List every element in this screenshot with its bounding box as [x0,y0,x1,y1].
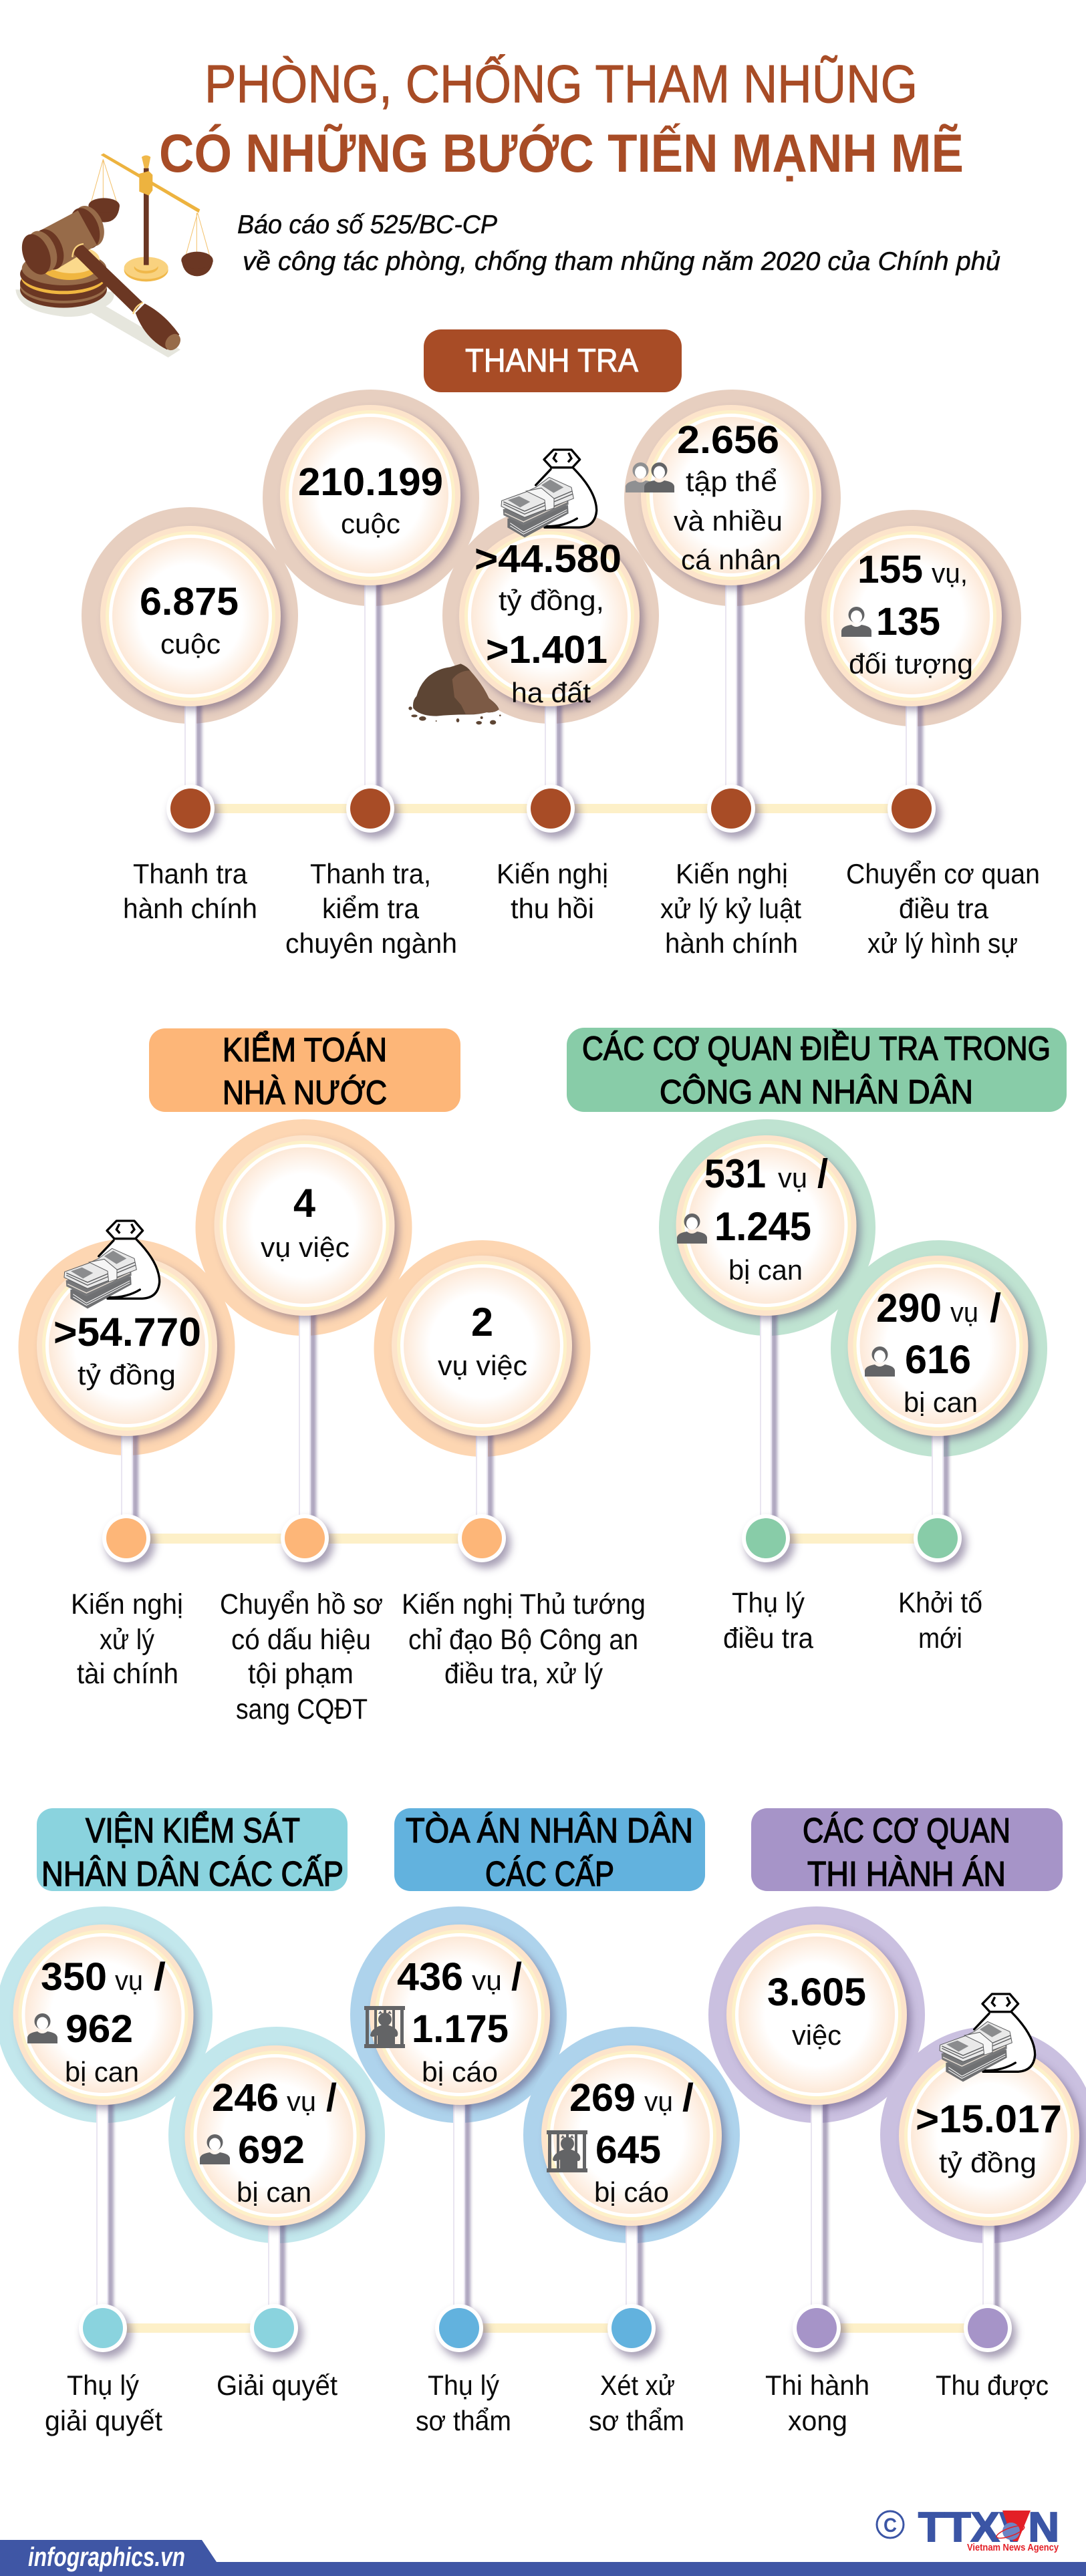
heading: thanh tra [424,329,682,392]
value: việc [792,2019,841,2051]
value [674,418,783,575]
value: 692 [238,2128,305,2172]
value: bị can [904,1387,978,1418]
heading: các cơ quan thi hành án: CÁC CƠ QUAN [803,1812,1010,1850]
timeline dot 3 [527,784,579,839]
value: 616 [905,1337,971,1382]
value [140,580,239,660]
label: thụ lý điều tra: Thụ lý [732,1587,805,1619]
value: 436 [397,1955,463,1999]
value: vụ [778,1162,807,1193]
value: bị can [237,2176,311,2208]
label: kiến nghị thủ tướng chỉ đạo bộ công an điều tra, xử lý: chỉ đạo Bộ Công an [408,1624,638,1656]
subtitle: Báo cáo số 525/BC-CP [237,210,497,239]
label: chuyển cơ quan điều tra xử lý hình sự: xử lý hình sự [867,927,1018,959]
label: chuyển cơ quan điều tra xử lý hình sự [846,858,1040,959]
value: 1.245 [714,1204,811,1249]
label: thụ lý sơ thẩm [416,2370,511,2436]
timeline dot 1 [742,1514,795,1568]
icon: money bag [501,450,597,537]
stat circle: >54.770 tỷ đồng [19,1239,235,1530]
value: 290 [876,1286,942,1330]
value: bị cáo [594,2176,669,2208]
stat circle: 246 vụ / 692 bị can [168,2027,385,2312]
panel: kiểm toán nhà nước [19,1028,646,1725]
value [41,1955,166,2088]
value: bị can [728,1254,803,1286]
heading: viện kiểm sát nhân dân các cấp [37,1808,348,1894]
value: 155 [857,548,923,591]
label: kiến nghị xử lý kỷ luật hành chính: hành chính [665,927,798,959]
value: 246 [212,2076,279,2120]
value: 210.199 [298,460,443,504]
stat circle: 155 vụ, 135 đối tượng [805,510,1021,802]
value: 2.656 [677,418,779,462]
value [438,1300,527,1381]
heading: viện kiểm sát nhân dân các cấp: NHÂN DÂN CÁC CẤP [41,1854,344,1894]
label: chuyển hồ sơ có dấu hiệu tội phạm sang CQĐT: sang CQĐT [236,1693,368,1725]
value: cuộc [160,628,221,660]
label: kiến nghị thu hồi: Kiến nghị [497,858,608,889]
value: vụ [644,2086,673,2117]
value: 1.175 [412,2007,509,2051]
icon: prisoner behind bars [364,2006,405,2048]
icon: money bag [64,1221,160,1308]
value: 962 [65,2007,133,2051]
heading: tòa án nhân dân các cấp: CÁC CẤP [485,1854,614,1894]
value [261,1181,350,1263]
stat circle: 6.875 cuộc [82,507,298,802]
heading: tòa án nhân dân các cấp: TÒA ÁN NHÂN DÂN [406,1812,693,1850]
heading: kiểm toán nhà nước: KIỂM TOÁN [223,1031,387,1068]
panel: tòa án nhân dân [350,1808,740,2436]
heading: viện kiểm sát nhân dân các cấp: VIỆN KIỂM SÁT [86,1811,300,1850]
stat circle: 531 vụ / 1.245 bị can [659,1119,875,1530]
label: kiến nghị thủ tướng chỉ đạo bộ công an điều tra, xử lý: Kiến nghị Thủ tướng [402,1588,646,1620]
stat circle: 210.199 cuộc [263,390,479,802]
timeline dot 1 [102,1514,155,1568]
value: / [511,1955,522,1999]
footer bar [0,2540,1086,2576]
label: thanh tra, kiểm tra chuyên ngành [285,858,457,959]
value: tập thể [686,466,777,497]
icon: person [200,2134,230,2164]
icon: person [841,607,871,637]
value: ha đất [511,677,591,708]
label: thụ lý sơ thẩm: Thụ lý [428,2370,499,2401]
value: >1.401 [486,628,607,672]
value: 645 [595,2128,661,2172]
panel: các cơ quan điều tra [567,1028,1067,1655]
timeline dot 2 [346,784,399,839]
timeline dot 2 [914,1514,966,1568]
logo: TTXVN: Vietnam News Agency [967,2542,1059,2553]
value: 531 [704,1151,766,1196]
value [212,2076,337,2208]
label: thu được: Thu được [936,2370,1049,2401]
value [876,1286,1001,1418]
label: kiến nghị xử lý kỷ luật hành chính: xử lý kỷ luật [660,893,801,924]
label: thanh tra hành chính: Thanh tra [133,858,248,889]
value: vụ [950,1296,978,1328]
stat circle: 290 vụ / 616 bị can [831,1240,1047,1530]
heading: thanh tra: THANH TRA [465,343,638,379]
value: tỷ đồng [939,2147,1037,2178]
value: vụ việc [261,1232,350,1263]
label: chuyển hồ sơ có dấu hiệu tội phạm sang CQĐT: tội phạm [248,1658,354,1690]
stat circle: >44.580 tỷ đồng, >1.401 ha đất [442,507,659,802]
title [159,54,964,184]
value [849,548,973,680]
timeline dot 1 [435,2304,488,2358]
label: xét xử sơ thẩm [589,2370,684,2436]
stat circle: 436 vụ / 1.175 bị cáo [350,1906,567,2312]
label: thụ lý giải quyết: giải quyết [45,2405,162,2436]
icon: money bag [940,1994,1035,2082]
value: vụ [287,2086,316,2117]
icon: person [677,1213,707,1244]
value: / [326,2076,337,2120]
value: / [682,2076,694,2120]
heading: các cơ quan điều tra trong công an nhân dân [567,1028,1067,1112]
label: chuyển cơ quan điều tra xử lý hình sự: Chuyển cơ quan [846,858,1040,889]
stat circle: 2 vụ việc [374,1240,591,1530]
stat circle: 269 vụ / 645 bị cáo [523,2027,740,2312]
value: 6.875 [140,580,239,623]
label: kiến nghị thủ tướng chỉ đạo bộ công an điều tra, xử lý: điều tra, xử lý [444,1658,603,1690]
label: kiến nghị thủ tướng chỉ đạo bộ công an điều tra, xử lý [402,1588,646,1690]
label: khởi tố mới: Khởi tố [898,1587,982,1619]
label: kiến nghị xử lý tài chính: Kiến nghị [71,1588,183,1620]
value [704,1151,828,1286]
label: xét xử sơ thẩm: Xét xử [600,2370,675,2401]
value: 2 [471,1300,493,1344]
timeline dot 4 [707,784,760,839]
label: khởi tố mới: mới [918,1622,962,1655]
value: / [817,1151,828,1196]
value: 3.605 [767,1971,866,2014]
timeline dot 1 [79,2304,132,2358]
label: thanh tra hành chính [123,858,257,924]
label: thi hành xong: xong [788,2405,847,2436]
value: bị cáo [422,2056,498,2088]
label: chuyển hồ sơ có dấu hiệu tội phạm sang CQĐT [220,1588,383,1725]
value [53,1310,201,1391]
timeline dot 1 [166,784,219,839]
label: chuyển hồ sơ có dấu hiệu tội phạm sang CQĐT: có dấu hiệu [231,1624,371,1656]
value [474,537,622,708]
value: bị can [65,2056,139,2088]
timeline dot 2 [281,1514,333,1568]
value [397,1955,522,2088]
timeline dot 2 [250,2304,303,2358]
logo: TTXVN: TTXVN [918,2505,1059,2551]
value: >15.017 [916,2098,1062,2141]
value: 269 [569,2076,636,2120]
subtitle: về công tác phòng, chống tham nhũng năm 2020 của Chính phủ [243,247,1000,276]
value: / [990,1286,1001,1330]
timeline connector [127,1534,482,1544]
stat circle: 2.656 tập thể và nhiều cá nhân [624,390,841,802]
timeline connector [817,2323,988,2333]
logo: TTXVN: C [884,2515,897,2537]
label: thi hành xong [765,2370,869,2436]
stat circle: 350 vụ / 962 bị can [0,1906,213,2312]
header illustration: gavel and scales [15,153,213,357]
label: kiến nghị xử lý kỷ luật hành chính: Kiến nghị [676,858,788,889]
label: thụ lý giải quyết [45,2370,162,2436]
value: 135 [876,600,940,643]
value: cá nhân [681,544,781,575]
label: thụ lý sơ thẩm: sơ thẩm [416,2405,511,2436]
value: 350 [41,1955,107,1999]
value: vụ việc [438,1350,527,1381]
timeline connector [766,1534,938,1544]
label: kiến nghị xử lý tài chính: xử lý [100,1624,154,1656]
label: kiến nghị thu hồi: thu hồi [511,893,594,924]
heading: các cơ quan thi hành án: THI HÀNH ÁN [807,1855,1006,1894]
label: chuyển hồ sơ có dấu hiệu tội phạm sang CQĐT: Chuyển hồ sơ [220,1588,383,1620]
stat circle: >15.017 tỷ đồng [880,2027,1086,2312]
label: thanh tra, kiểm tra chuyên ngành: chuyên ngành [285,927,457,959]
stat circle: 3.605 việc [708,1906,925,2312]
value [916,2098,1062,2178]
timeline connector [459,2323,632,2333]
value: 4 [293,1181,316,1226]
timeline connector [103,2323,274,2333]
value: và nhiều [674,505,783,537]
value: >44.580 [474,537,622,581]
icon: prisoner behind bars [547,2130,587,2172]
label: xét xử sơ thẩm: sơ thẩm [589,2405,684,2436]
value: vụ [472,1965,502,1996]
value: tỷ đồng [78,1359,176,1391]
label: chuyển cơ quan điều tra xử lý hình sự: điều tra [899,893,989,924]
subtitle [237,210,1000,276]
timeline dot 5 [888,784,940,839]
panel: các cơ quan thi hành án [708,1808,1086,2436]
heading: các cơ quan thi hành án [751,1808,1063,1894]
label: kiến nghị thu hồi [497,858,608,924]
title: PHÒNG, CHỐNG THAM NHŨNG [205,54,918,114]
timeline dot 2 [964,2304,1016,2358]
label: thụ lý giải quyết: Thụ lý [67,2370,139,2401]
value: đối tượng [849,648,973,680]
value [298,460,443,539]
label: kiến nghị xử lý tài chính: tài chính [77,1658,178,1690]
timeline dot 3 [458,1514,511,1568]
panel: thanh tra [82,329,1040,959]
label: khởi tố mới [898,1587,982,1655]
value: tỷ đồng, [499,585,604,616]
value [569,2076,694,2208]
label: giải quyết: Giải quyết [217,2370,337,2401]
heading: các cơ quan điều tra trong công an nhân dân: CÔNG AN NHÂN DÂN [660,1073,973,1111]
footer bar: infographics.vn [28,2543,185,2572]
heading: tòa án nhân dân các cấp [394,1808,705,1894]
value: cuộc [341,508,400,539]
stat circle: 4 vụ việc [195,1119,412,1530]
title: CÓ NHỮNG BƯỚC TIẾN MẠNH MẼ [159,123,964,184]
value: >54.770 [53,1310,201,1354]
heading: kiểm toán nhà nước: NHÀ NƯỚC [223,1074,387,1111]
label: kiến nghị xử lý tài chính [71,1588,183,1690]
icon: soil pile [408,664,501,724]
timeline dot 2 [607,2304,660,2358]
label: thanh tra hành chính: hành chính [123,893,257,924]
icon: person [865,1346,895,1377]
label: thụ lý điều tra: điều tra [723,1622,813,1655]
timeline dot 1 [793,2304,845,2358]
heading: kiểm toán nhà nước [149,1028,460,1112]
label: thanh tra, kiểm tra chuyên ngành: kiểm tra [322,893,420,924]
label: thi hành xong: Thi hành [765,2370,869,2401]
label: thanh tra, kiểm tra chuyên ngành: Thanh tra, [310,858,431,889]
timeline connector [190,804,912,813]
label: kiến nghị xử lý kỷ luật hành chính [660,858,801,959]
value: vụ [115,1965,143,1996]
panel: viện kiểm sát [0,1808,385,2436]
value [767,1971,866,2051]
icon: person [27,2013,57,2043]
icon: two people [626,462,674,492]
value: / [154,1955,166,1999]
value: vụ, [932,557,968,589]
label: thụ lý điều tra [723,1587,813,1655]
